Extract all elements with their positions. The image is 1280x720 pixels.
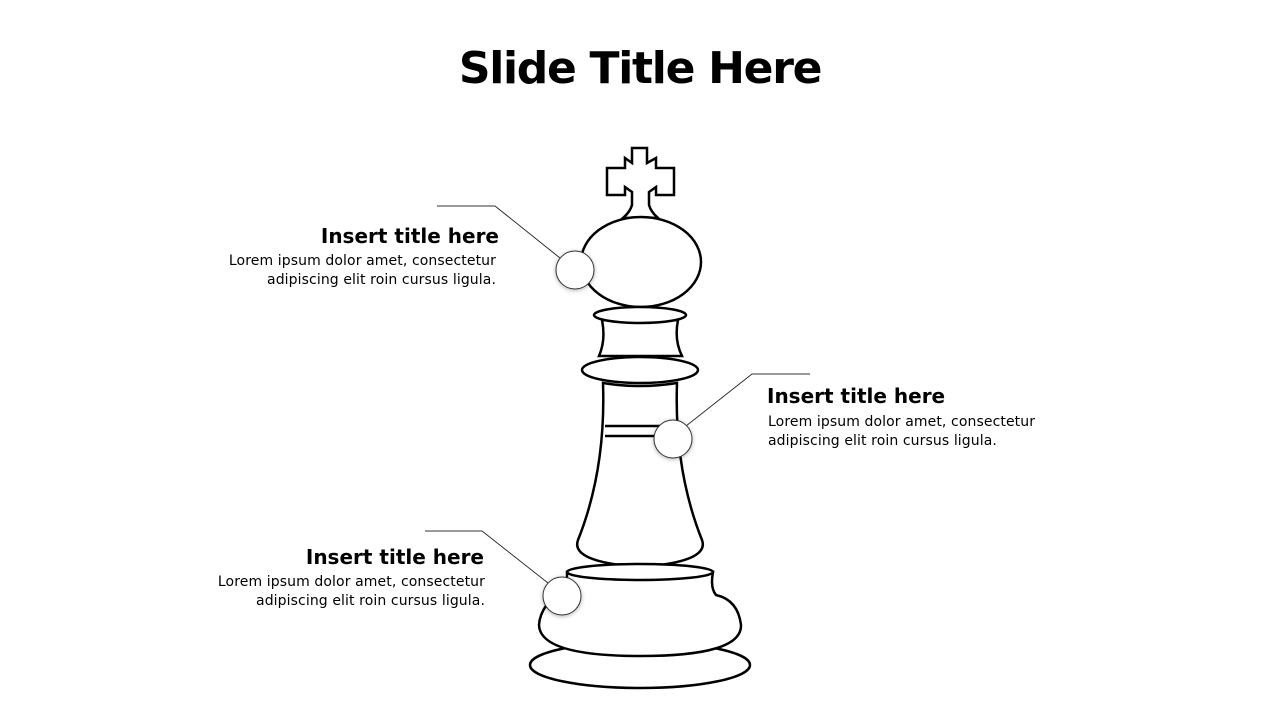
text block: top left: Insert title here [321, 224, 499, 248]
body [577, 383, 703, 567]
text block: bottom left: adipiscing elit roin cursus ligula. [256, 593, 485, 609]
text block: bottom left: Lorem ipsum dolor amet, consectetur [218, 574, 485, 590]
upper collar and neck [582, 307, 698, 383]
text block: right [767, 384, 1035, 449]
king head ball [581, 217, 701, 307]
marker circles [543, 251, 692, 615]
text block: right: Lorem ipsum dolor amet, consectetur [768, 414, 1035, 430]
text block: top left: adipiscing elit roin cursus ligula. [267, 272, 496, 288]
icon: king cross [607, 148, 674, 218]
title: Slide Title Here [459, 43, 821, 94]
text block: bottom left: Insert title here [306, 545, 484, 569]
base [530, 564, 750, 688]
text block: right: Insert title here [767, 384, 945, 408]
text block: bottom left [218, 545, 485, 609]
text block: top left [229, 224, 499, 288]
text block: top left: Lorem ipsum dolor amet, consectetur [229, 253, 496, 269]
leader lines [425, 206, 810, 583]
text block: right: adipiscing elit roin cursus ligula. [768, 433, 997, 449]
